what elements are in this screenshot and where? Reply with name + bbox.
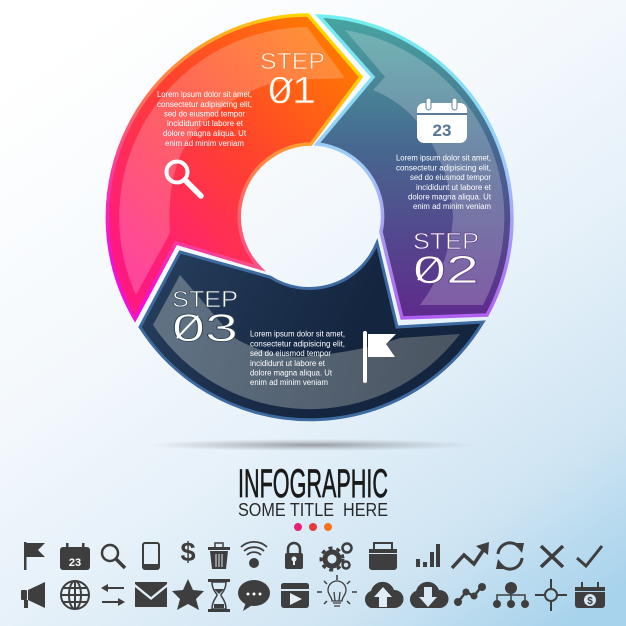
icon: check (577, 546, 602, 566)
icon: bars (416, 544, 440, 567)
text: step 1 paragraph: consectetur adipisicing elit, (157, 100, 252, 109)
icon: video window (281, 583, 309, 608)
text: step 3 paragraph: incididunt ut labore et (250, 359, 326, 368)
icon: refresh (496, 543, 524, 569)
text: step 1 paragraph: dolore magna aliqua. Ut (163, 129, 247, 138)
shadow (147, 439, 477, 451)
gloss 1 (119, 27, 345, 295)
step 2 label (413, 228, 479, 292)
text: step 3 paragraph (250, 330, 345, 387)
icon: dollar calendar: $ (587, 596, 593, 607)
icon: calendar (417, 98, 467, 143)
step 2 label: 02 (413, 249, 479, 292)
step 3 label: STEP (172, 286, 238, 312)
text: step 1 paragraph: incididunt ut labore et (167, 119, 244, 128)
icon: crosshair (535, 579, 567, 611)
panel: step 3 (140, 243, 483, 420)
icon: calendar (60, 543, 90, 570)
icon row 2 (21, 575, 605, 612)
icon: flag (363, 331, 396, 383)
icon: megaphone (21, 582, 45, 608)
dots (294, 523, 332, 531)
cycle diagram (107, 15, 512, 420)
title: INFOGRAPHIC (238, 462, 388, 506)
icon: cloud upload (365, 582, 404, 608)
text: step 2 paragraph: dolore magna aliqua. Ut (408, 192, 492, 202)
icon: nodes (454, 583, 486, 606)
text: step 3 paragraph: enim ad minim veniam (250, 378, 328, 387)
icon: speech bubble (238, 580, 270, 611)
panel: step 2 (317, 16, 512, 318)
icon: dollar calendar (575, 582, 605, 608)
text: step 3 paragraph: sed do eiusmod tempor (250, 349, 331, 358)
step 3 label: 03 (172, 307, 238, 350)
text: step 1 paragraph: enim ad minim veniam (165, 139, 244, 148)
icon: light bulb (317, 575, 357, 606)
icon row 1 (24, 537, 602, 570)
icon: tablet (143, 543, 159, 569)
icon: gears (321, 544, 352, 570)
icon: calendar: 23 (69, 557, 81, 569)
text: step 2 paragraph: sed do eiusmod tempor (410, 173, 491, 182)
text: step 2 paragraph: consectetur adipisicing elit, (396, 164, 491, 172)
icon: star (172, 579, 204, 610)
text: step 2 paragraph: Lorem ipsum dolor sit amet, (396, 154, 491, 163)
step 1 label: STEP (260, 48, 325, 74)
icon: cross (541, 546, 563, 567)
step 1 label: 01 (268, 70, 316, 112)
step 2 label: STEP (413, 228, 479, 254)
subtitle: SOME TITLE HERE (238, 500, 388, 520)
icon: trend (452, 542, 489, 568)
icon: magnifier (102, 545, 125, 568)
icon: mail (135, 582, 167, 607)
icon: magnifier (166, 162, 201, 196)
icon: globe (61, 581, 89, 609)
icon: lock (285, 543, 303, 569)
icon: arrows (101, 584, 125, 606)
icon: hierarchy (493, 582, 529, 608)
step 3 label (172, 286, 238, 350)
text: step 3 paragraph: dolore magna aliqua. Ut (250, 368, 333, 378)
step 1 label (260, 48, 325, 112)
icon: wifi (241, 542, 267, 568)
text: step 2 paragraph (396, 154, 492, 211)
text: step 2 paragraph: enim ad minim veniam (413, 202, 491, 211)
icon: dollar: $ (180, 537, 196, 567)
icon: cloud download (410, 582, 449, 608)
icon: flag (24, 542, 45, 570)
text: step 1 paragraph: sed do eiusmod tempor (164, 110, 245, 118)
text: step 2 paragraph: incididunt ut labore et (416, 183, 492, 192)
text: step 3 paragraph: consectetur adipisicing elit, (250, 340, 345, 348)
text: step 1 paragraph: Lorem ipsum dolor sit amet, (157, 90, 252, 99)
icon: calendar: 23 (433, 121, 451, 140)
text: step 1 paragraph (157, 90, 252, 148)
gloss 3 (153, 275, 460, 409)
panel: step 1 (107, 15, 361, 319)
gloss 2 (345, 30, 504, 305)
icon: toolbox (369, 543, 397, 570)
icon: trash (208, 543, 230, 569)
text: step 3 paragraph: Lorem ipsum dolor sit amet, (250, 330, 345, 339)
icon: hourglass (208, 579, 230, 612)
